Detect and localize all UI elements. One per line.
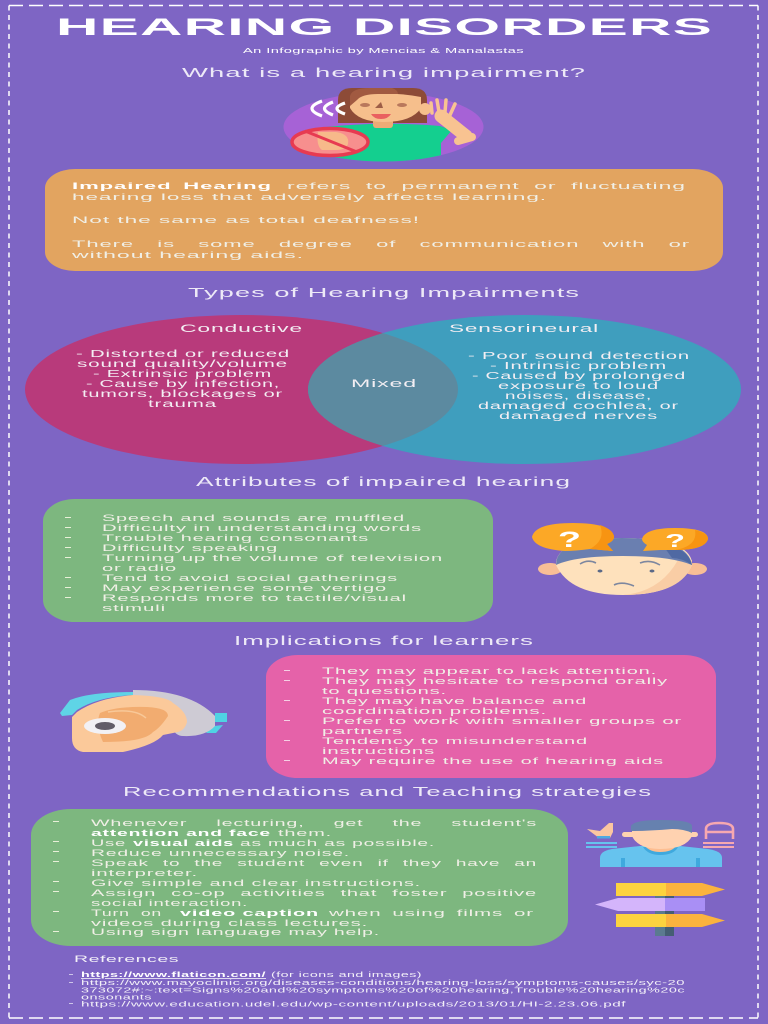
attributes text: Speech and sounds are muffled: [102, 513, 405, 524]
attributes text: Trouble hearing consonants: [102, 533, 369, 544]
implications text: They may appear to lack attention.: [322, 666, 657, 677]
heading: attributes of impaired hearing: Attributes of impaired hearing: [196, 475, 571, 489]
sensorineural text: damaged cochlea, or: [478, 401, 680, 412]
recommendations text: Using sign language may help.: [91, 927, 380, 938]
panel: definition of impaired hearing: [45, 169, 723, 271]
icon: confused head with question marks: [532, 523, 708, 595]
implications text: Prefer to work with smaller groups or: [322, 716, 682, 727]
recommendations text: them.: [278, 828, 332, 839]
references list: 373072#:~:text=Signs%20and%20symptoms%20of%20hearing,Trouble%20hearing%20c: [81, 986, 685, 994]
references list: https://www.education.udel.edu/wp-content/uploads/2013/01/HI-2.23.06.pdf: [81, 1000, 627, 1008]
definition text: [70, 181, 690, 261]
implications text: partners: [322, 726, 403, 737]
references list: (for icons and images): [271, 970, 422, 979]
recommendations text: attention and face: [91, 828, 271, 839]
icon: person using sign language: [586, 820, 734, 867]
definition text: without hearing aids.: [70, 250, 304, 261]
implications text: [284, 666, 682, 767]
recommendations text: visual aids: [133, 838, 234, 849]
recommendations text: social interaction.: [91, 898, 248, 909]
attributes text: Turning up the volume of television: [102, 553, 443, 564]
right question bubble: ?: [665, 531, 685, 551]
sensorineural text: noises, disease,: [505, 391, 652, 402]
implications text: coordination problems.: [322, 706, 547, 717]
recommendations text: videos during class lectures.: [91, 918, 368, 929]
definition text: refers to permanent or fluctuating: [287, 181, 686, 192]
implications text: Tendency to misunderstand: [322, 736, 588, 747]
left question bubble: ?: [558, 527, 581, 552]
recommendations text: interpreter.: [91, 868, 198, 879]
sensorineural label: Sensorineural: [449, 323, 599, 335]
conductive text: - Distorted or reduced: [76, 349, 290, 360]
references list: [69, 970, 685, 1008]
venn diagram: [25, 315, 741, 464]
attributes text: May experience some vertigo: [102, 583, 387, 594]
right question bubble: [642, 528, 708, 551]
recommendations text: Whenever lecturing, get the student's: [91, 818, 537, 829]
recommendations text: Assign co-op activities that foster positive: [91, 888, 537, 899]
sensorineural text: damaged nerves: [499, 411, 658, 422]
sensorineural text: exposure to loud: [498, 381, 659, 392]
recommendations text: Give simple and clear instructions.: [91, 878, 421, 889]
heading: what is a hearing impairment: What is a hearing impairment?: [182, 66, 586, 80]
attributes text: Difficulty speaking: [102, 543, 278, 554]
references list: https://www.flaticon.com/: [81, 970, 267, 979]
heading: types of hearing impairments: Types of Hearing Impairments: [188, 286, 580, 300]
attributes text: stimuli: [102, 603, 166, 614]
implications text: They may hesitate to respond orally: [322, 676, 668, 687]
implications text: to questions.: [322, 686, 447, 697]
conductive text: sound quality/volume: [77, 359, 288, 370]
references list: onsonants: [81, 992, 152, 1002]
panel: recommendations list: [31, 809, 568, 946]
definition text: hearing loss that adversely affects learning.: [72, 192, 547, 203]
attributes text: or radio: [102, 563, 177, 574]
implications text: instructions: [322, 746, 435, 757]
attributes text: Tend to avoid social gatherings: [102, 573, 398, 584]
conductive text: - Extrinsic problem: [93, 369, 272, 380]
recommendations text: Reduce unnecessary noise.: [91, 848, 350, 859]
conductive text: tumors, blockages or: [82, 389, 284, 400]
panel: attributes list: [43, 499, 493, 622]
icon: hand sign: [586, 823, 617, 847]
definition text: There is some degree of communication with or: [72, 239, 690, 250]
heading: implications for learners: Implications for learners: [234, 634, 534, 648]
icon: crossed-out ear: [292, 128, 368, 156]
sensorineural text: - Poor sound detection: [468, 351, 690, 362]
conductive text: [76, 349, 290, 410]
attributes text: [65, 513, 443, 614]
references heading: References: [74, 954, 179, 965]
recommendations text: Use: [91, 838, 126, 849]
recommendations text: when using films or: [327, 908, 534, 919]
icon: ear with hearing aid: [60, 690, 227, 752]
conductive text: - Cause by infection,: [86, 379, 280, 390]
sensorineural text: - Intrinsic problem: [490, 361, 667, 372]
attributes text: Difficulty in understanding words: [102, 523, 422, 534]
icon: letter A: [703, 823, 734, 847]
title: HEARING DISORDERS: [56, 14, 713, 41]
recommendations text: Turn on: [91, 908, 162, 919]
sensorineural text: - Caused by prolonged: [472, 371, 686, 382]
recommendations text: Speak to the student even if they have an: [91, 858, 537, 869]
heading: recommendations and teaching strategies: Recommendations and Teaching strategies: [123, 785, 652, 799]
implications text: They may have balance and: [322, 696, 587, 707]
implications text: May require the use of hearing aids: [322, 756, 664, 767]
recommendations text: video caption: [180, 908, 319, 919]
sensorineural text: [468, 351, 690, 422]
references list: https://www.mayoclinic.org/diseases-conditions/hearing-loss/symptoms-causes/syc-20: [81, 978, 685, 987]
icon: signpost with arrows: [595, 883, 725, 936]
conductive text: trauma: [148, 399, 217, 410]
left question bubble: [532, 523, 614, 552]
panel: implications list: [266, 655, 716, 778]
icon: woman cupping her ear: [284, 88, 484, 162]
mixed label: Mixed: [351, 378, 417, 390]
subtitle: An Infographic by Mencias & Manalastas: [243, 46, 524, 55]
conductive label: Conductive: [180, 323, 303, 335]
attributes text: Responds more to tactile/visual: [102, 593, 407, 604]
definition text: Not the same as total deafness!: [72, 215, 420, 226]
definition text: Impaired Hearing: [72, 181, 272, 192]
recommendations text: as much as possible.: [240, 838, 435, 849]
recommendations text: [53, 818, 537, 938]
